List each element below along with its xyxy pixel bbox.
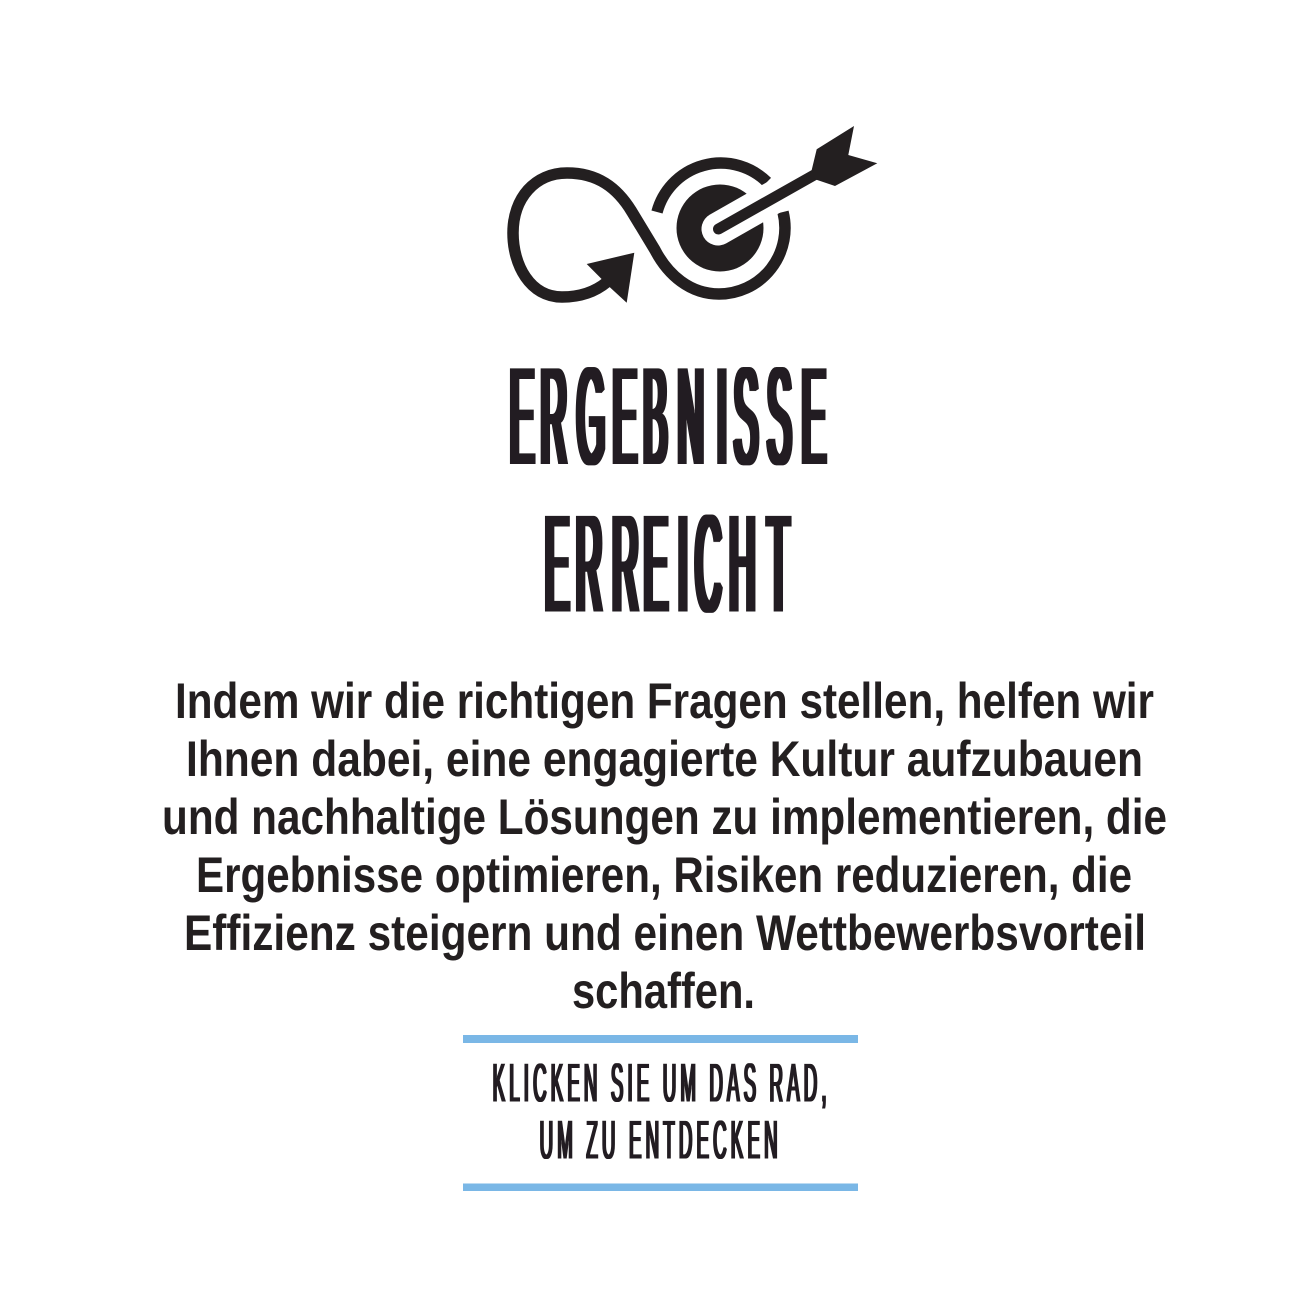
target bullseye — [676, 184, 764, 272]
title — [510, 338, 826, 642]
body text: Effizienz steigern und einen Wettbewerbsvorteil — [184, 905, 1146, 961]
arrow fletching — [812, 126, 877, 186]
call to action text: KLICKEN SIE UM DAS RAD, — [493, 1052, 827, 1114]
body text: Indem wir die richtigen Fragen stellen, helfen wir — [175, 673, 1154, 729]
call to action top rule — [463, 1035, 858, 1043]
body text: Ihnen dabei, eine engagierte Kultur aufzubauen — [186, 731, 1143, 787]
title: ERGEBNISSE — [510, 338, 826, 494]
body text — [162, 673, 1167, 1019]
body text: schaffen. — [572, 963, 755, 1019]
infinity loop line — [513, 173, 785, 297]
arrow shaft — [718, 174, 815, 229]
title: ERREICHT — [545, 486, 789, 642]
call to action text — [493, 1052, 827, 1171]
call to action bottom rule — [463, 1184, 858, 1191]
loop arrowhead — [587, 253, 634, 303]
arrow halo — [718, 188, 790, 229]
call to action text: UM ZU ENTDECKEN — [540, 1109, 778, 1171]
body text: Ergebnisse optimieren, Risiken reduzieren, die — [196, 847, 1132, 903]
icon: infinity loop with target and arrow — [513, 126, 877, 303]
target outer ring — [657, 163, 767, 212]
